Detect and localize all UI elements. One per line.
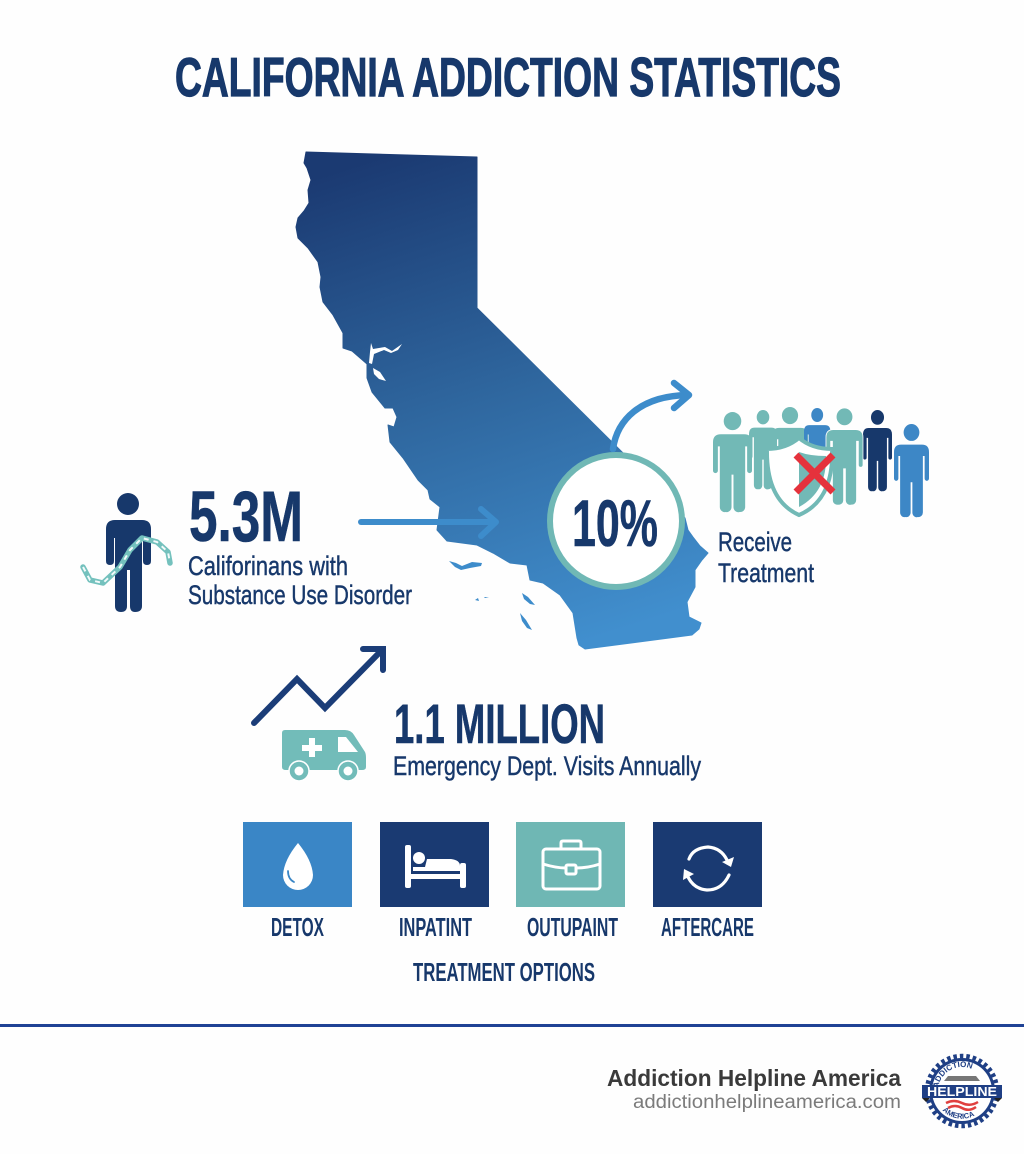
shield: [767, 438, 832, 515]
icon: cycle arrows: [688, 847, 729, 890]
panel: detox: [243, 822, 352, 942]
caption: receive treatment: Receive: [718, 527, 792, 557]
panel: inpatient: [380, 822, 489, 942]
panel: outpatient: [516, 822, 625, 942]
arrow: to map: [361, 509, 496, 536]
san francisco bay: [369, 343, 402, 381]
footer brand: Addiction Helpline America: [607, 1065, 901, 1091]
logo badge: HELPLINE: [927, 1085, 997, 1099]
caption: receive treatment: Treatment: [718, 558, 814, 588]
icon: person in chains: [83, 493, 170, 612]
label: AFTERCARE: [661, 912, 754, 942]
red x: [796, 455, 833, 492]
stat: 5.3M: 5.3M: [189, 478, 303, 557]
icon: rising trend arrow: [254, 649, 383, 723]
icon: ambulance: [282, 730, 366, 781]
footer brand: addictionhelplineamerica.com: [633, 1092, 901, 1113]
footer brand: [607, 1065, 901, 1113]
stat: 1.1 million: [393, 692, 701, 781]
logo badge: [922, 1054, 1002, 1128]
icon: bed: [405, 845, 466, 888]
channel islands: [449, 561, 535, 630]
caption: Californians: Califorinans with: [188, 551, 348, 581]
caption: substance use disorder: Substance Use Disorder: [188, 580, 412, 610]
california map: [296, 152, 708, 649]
caption: receive treatment: [718, 527, 814, 588]
logo badge: ADDICTION: [933, 1061, 973, 1085]
stat circle: 10%: [550, 455, 682, 587]
icon: drop: [283, 843, 313, 890]
icon: group of people with shield: [713, 407, 929, 517]
stat: 1.1 million: 1.1 MILLION: [394, 692, 605, 755]
label: INPATINT: [399, 912, 472, 942]
stat circle: 10%: 10%: [572, 486, 658, 560]
label: DETOX: [271, 912, 324, 942]
logo badge: AMERICA: [942, 1108, 974, 1119]
chain: [83, 538, 170, 583]
arrow: curved out of circle: [613, 383, 689, 449]
label: OUTUPAINT: [527, 912, 618, 942]
caption: emergency visits: Emergency Dept. Visits Annually: [393, 751, 701, 781]
stat: 5.3M: [188, 478, 412, 610]
panel: aftercare: [653, 822, 762, 942]
heading: treatment options: TREATMENT OPTIONS: [413, 957, 595, 987]
icon: briefcase: [543, 841, 600, 889]
